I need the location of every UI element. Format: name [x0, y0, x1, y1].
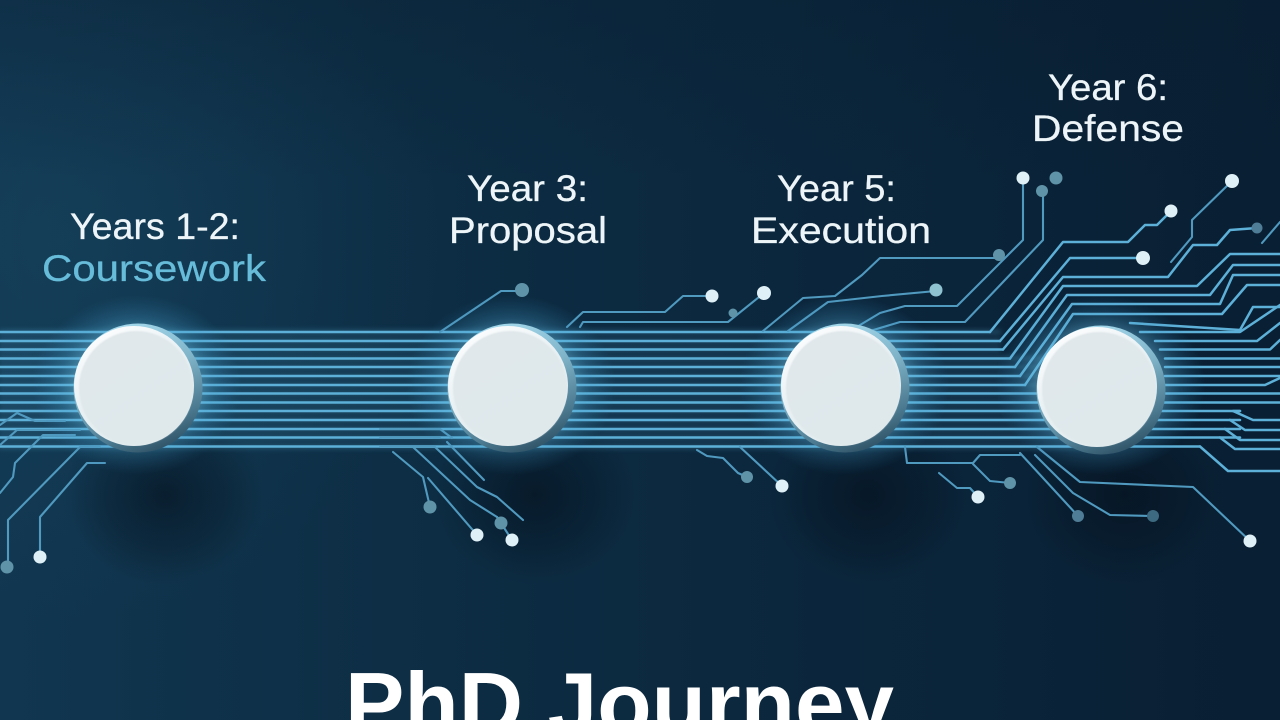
label: year 6 defense	[1032, 67, 1184, 149]
label: year 5 execution: Year 5:	[777, 168, 896, 209]
label: years 1-2 coursework: Coursework	[42, 248, 267, 289]
lower right branches	[905, 447, 1250, 541]
label: year 3 proposal: Proposal	[449, 210, 607, 251]
label: year 5 execution: Execution	[751, 210, 931, 251]
node drop shadows	[65, 405, 1225, 585]
label: year 3 proposal: Year 3:	[467, 168, 588, 209]
label: year 6 defense: Year 6:	[1048, 67, 1168, 108]
label: years 1-2 coursework: Years 1-2:	[70, 206, 240, 247]
node: years 1-2	[74, 324, 202, 452]
straight central bus	[0, 332, 1280, 446]
left edge branches	[0, 413, 105, 567]
trace glow band	[0, 332, 1100, 446]
circuit traces	[0, 178, 1280, 567]
right side traces	[1130, 181, 1280, 471]
node two branches	[380, 291, 764, 540]
upper right fan of traces	[763, 178, 1280, 385]
lower middle branches	[697, 447, 782, 486]
circuit end dots	[0, 172, 1262, 574]
node glows	[32, 295, 1205, 475]
node: year 6	[1036, 326, 1166, 454]
node: year 3	[448, 324, 576, 452]
label: years 1-2 coursework	[42, 206, 267, 289]
label: year 3 proposal	[449, 168, 607, 251]
node: year 5	[780, 324, 910, 452]
label: year 6 defense: Defense	[1032, 108, 1184, 149]
label: year 5 execution	[751, 168, 931, 251]
